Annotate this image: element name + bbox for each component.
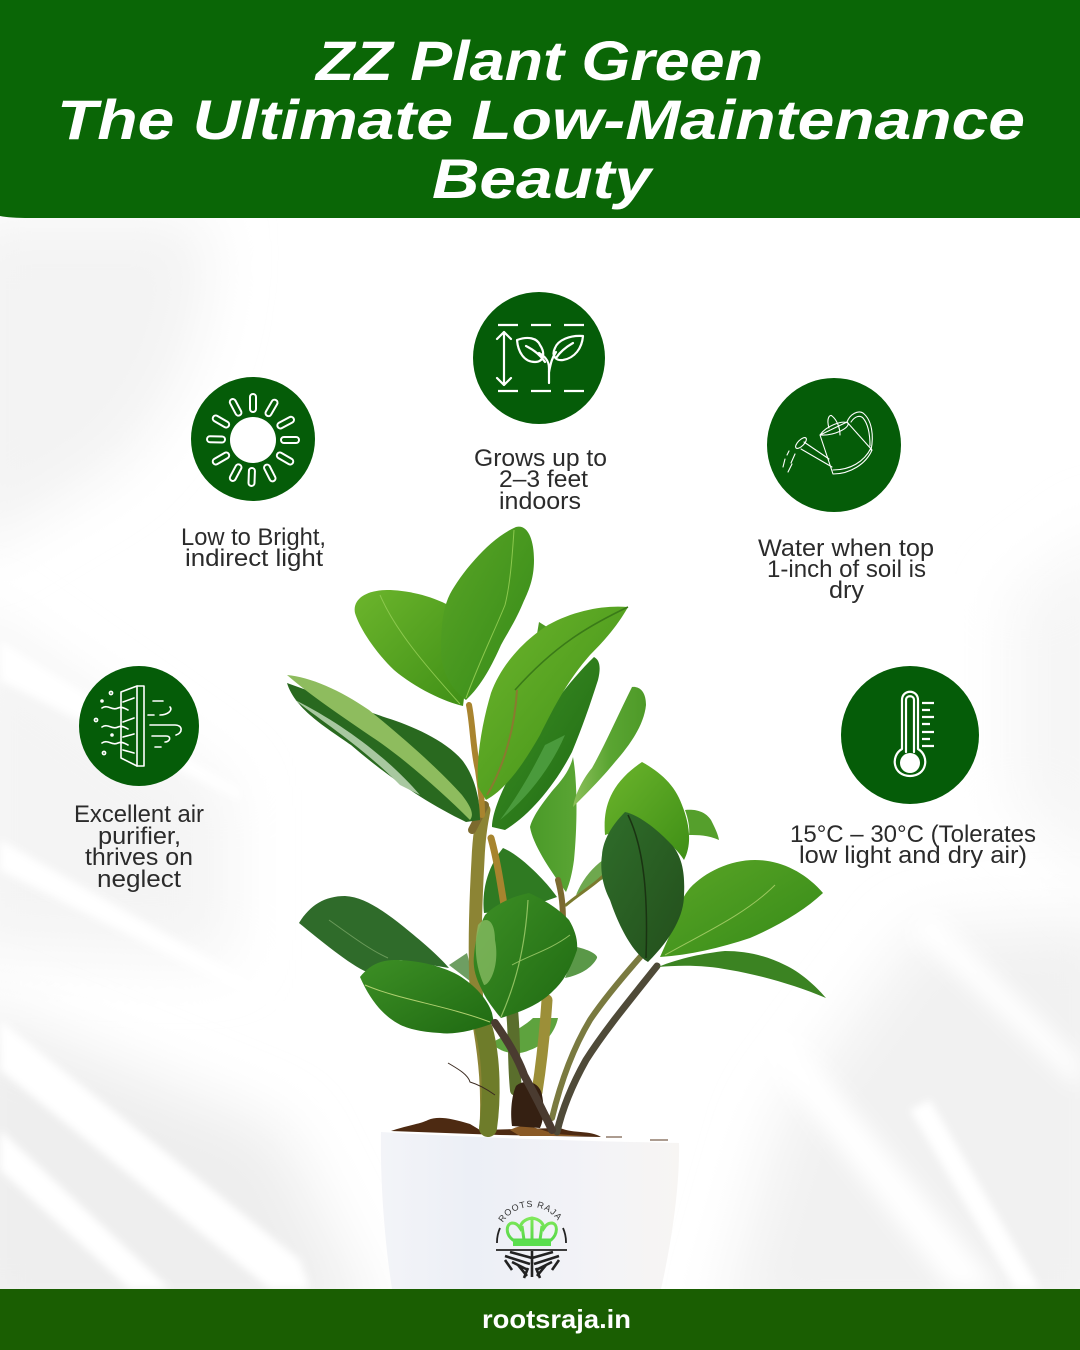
rhizome <box>511 1082 543 1128</box>
icon: air purifier <box>79 666 199 786</box>
icon: thermometer <box>841 666 979 804</box>
label: temperature: low light and dry air) <box>799 842 1027 869</box>
label: water: Water when top <box>758 535 934 562</box>
right dark leaf group <box>601 812 826 998</box>
label: temperature: 15°C – 30°C (Tolerates <box>790 821 1036 848</box>
title: The Ultimate Low-Maintenance <box>57 88 1025 151</box>
logo: Roots Raja: ROOTS RAJA <box>498 1200 561 1222</box>
lower front leaves <box>299 893 577 1130</box>
label: water: 1-inch of soil is <box>767 556 926 583</box>
website: rootsraja.in <box>482 1304 631 1334</box>
label: light <box>181 524 326 572</box>
soil <box>391 1118 668 1140</box>
upper leaves <box>287 527 628 830</box>
icon: plant height <box>473 292 605 424</box>
leaves behind stems <box>449 622 719 1053</box>
label: height <box>474 445 607 515</box>
label: air purifier: thrives on <box>85 844 193 871</box>
icon: sun <box>191 377 315 501</box>
label: air purifier: Excellent air <box>74 801 204 828</box>
stems <box>469 705 657 1132</box>
header banner <box>0 0 1080 218</box>
title <box>57 29 1025 210</box>
plant <box>287 527 826 1132</box>
label: water: dry <box>829 577 864 604</box>
title: ZZ Plant Green <box>314 29 763 92</box>
label: air purifier <box>74 801 204 893</box>
label: height: Grows up to <box>474 445 607 472</box>
logo: Roots Raja <box>496 1200 567 1278</box>
label: air purifier: purifier, <box>98 823 181 850</box>
label: light: indirect light <box>185 545 323 572</box>
title: Beauty <box>432 147 654 210</box>
icon: watering can <box>767 378 901 512</box>
label: light: Low to Bright, <box>181 524 326 551</box>
label: water <box>758 535 934 604</box>
pot with logo <box>381 1132 679 1289</box>
label: air purifier: neglect <box>97 866 181 893</box>
footer banner <box>0 1289 1080 1350</box>
label: height: 2–3 feet <box>499 466 588 493</box>
label: height: indoors <box>499 488 581 515</box>
label: temperature <box>790 821 1036 869</box>
